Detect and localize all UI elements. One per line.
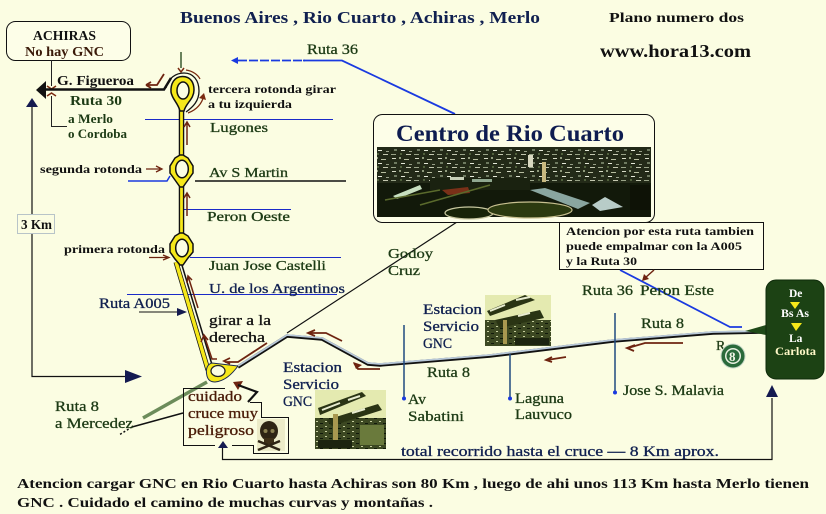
- callout: alternate route notice: Atencion por esta ruta tambien: [566, 224, 754, 238]
- panel: direction De Bs As a La Carlota: [766, 280, 824, 379]
- label: Peron Oeste: Peron Oeste: [207, 210, 290, 225]
- label: Peron Este: Peron Este: [640, 283, 714, 299]
- arrows: direction along Ruta 8: [308, 330, 683, 369]
- label: Godoy Cruz: [388, 247, 433, 279]
- Ruta 36 east line: [620, 270, 742, 327]
- total distance arrow line: [218, 385, 778, 460]
- label: a Merlo o Cordoba: [68, 112, 128, 141]
- label: Juan Jose Castelli: Juan Jose Castelli: [209, 259, 326, 274]
- street: Laguna Lauvuco: Laguna: [515, 391, 565, 407]
- label: primera rotonda: [64, 242, 169, 260]
- label: Ruta A005 with arrow: Ruta A005: [99, 296, 170, 312]
- callout: dangerous crossing: cuidado: [188, 389, 242, 405]
- footer note: GNC . Cuidado el camino de muchas curvas y montañas .: [17, 496, 433, 511]
- label: Estacion Servicio GNC right: Servicio: [423, 319, 479, 335]
- label: Ruta 8 a Mercedez: [55, 399, 134, 432]
- callout: dangerous crossing: peligroso: [188, 423, 254, 439]
- callout: dangerous crossing: cruce muy: [188, 406, 259, 422]
- label: a Merlo o Cordoba: o Cordoba: [68, 127, 128, 141]
- label: girar a la derecha: girar a la: [209, 313, 272, 329]
- arrow: right turn at junction: [224, 343, 267, 364]
- direction arrows along main road: [184, 122, 217, 359]
- label: Ruta 36 top with line: Ruta 36: [307, 42, 358, 58]
- title: Buenos Aires , Rio Cuarto , Achiras , Merlo: [180, 8, 540, 27]
- label: Ruta 8 a Mercedez: a Mercedez: [55, 416, 134, 432]
- panel: direction De Bs As a La Carlota: La: [789, 333, 803, 345]
- label: Estacion Servicio GNC right: [423, 302, 483, 352]
- label: primera rotonda: primera rotonda: [64, 242, 165, 256]
- icon: Ruta 8 badge: [716, 339, 745, 368]
- label: tercera rotonda: [208, 82, 337, 111]
- label: Lugones: Lugones: [210, 121, 268, 136]
- street: Av Sabatini: Sabatini: [408, 409, 464, 425]
- label: girar a la derecha: derecha: [209, 330, 266, 346]
- street: Av Sabatini: Av: [408, 392, 427, 408]
- street: Jose S. Malavia: Jose S. Malavia: [623, 383, 725, 399]
- label: Estacion Servicio GNC right: Estacion: [423, 302, 483, 318]
- label: G. Figueroa: G. Figueroa: [57, 74, 134, 89]
- label: Ruta 8 middle: Ruta 8: [427, 365, 470, 381]
- panel: direction De Bs As a La Carlota: De: [789, 288, 802, 300]
- icon: first roundabout: [170, 233, 193, 265]
- label: a Merlo o Cordoba: a Merlo: [68, 112, 113, 126]
- callout: Achiras no GNC: No hay GNC: [25, 45, 104, 60]
- icon: skull: [257, 419, 285, 451]
- photo: gas station right: [485, 295, 551, 346]
- label: Ruta 8 east: Ruta 8: [641, 316, 684, 332]
- icon: Ruta 8 badge: 8: [729, 349, 736, 364]
- panel: direction De Bs As a La Carlota: Bs As: [781, 308, 810, 320]
- callout: alternate route notice: y la Ruta 30: [566, 254, 637, 268]
- street: Laguna Lauvuco: Lauvuco: [515, 407, 572, 423]
- road: Ruta 8: [119, 325, 766, 435]
- street: Jose S. Malavia: [613, 313, 725, 399]
- label: girar a la derecha: [209, 313, 272, 346]
- icon: junction roundabout: [206, 363, 238, 382]
- callout: Achiras no GNC: ACHIRAS: [33, 28, 96, 43]
- heading: Centro de Rio Cuarto: Centro de Rio Cuarto: [396, 121, 624, 146]
- icon: Ruta 8 badge: R: [716, 339, 726, 354]
- icon: third roundabout: [166, 52, 206, 113]
- Godoy Cruz street line: [287, 222, 457, 333]
- street: Laguna Lauvuco: [508, 354, 572, 423]
- label: tercera rotonda: tercera rotonda girar: [208, 82, 337, 96]
- callout: dangerous crossing: [184, 381, 288, 454]
- icon: second roundabout: [170, 155, 193, 187]
- photo: city aerial: [377, 147, 651, 219]
- label: Ruta 36 east: Ruta 36: [582, 283, 633, 299]
- callout: alternate route notice: [560, 222, 764, 270]
- label: Ruta 30: Ruta 30: [70, 94, 122, 109]
- street: Av Sabatini: [402, 325, 464, 425]
- subtitle: plano numero dos: Plano numero dos: [609, 10, 744, 25]
- footer note: [17, 477, 809, 511]
- footer note: Atencion cargar GNC en Rio Cuarto hasta Achiras son 80 Km , luego de ahi unos 113 Km hasta Merlo tienen: [17, 477, 809, 492]
- arrow: left turn into G. Figueroa: [146, 74, 164, 88]
- street lines: [127, 120, 346, 294]
- label: U. de los Argentinos: U. de los Argentinos: [209, 282, 345, 297]
- label: Estacion Servicio GNC left: [283, 360, 343, 410]
- label: Estacion Servicio GNC left: GNC: [283, 394, 312, 410]
- label: Ruta A005 with arrow: [99, 296, 187, 316]
- label: tercera rotonda: a tu izquierda: [208, 97, 292, 111]
- label: 3 Km: [18, 214, 54, 234]
- label: Godoy Cruz: Godoy: [388, 247, 433, 262]
- label: Estacion Servicio GNC right: GNC: [423, 336, 452, 352]
- panel: Centro de Rio Cuarto: [374, 114, 654, 222]
- label: Estacion Servicio GNC left: Servicio: [283, 377, 339, 393]
- label: Ruta 8 a Mercedez: Ruta 8: [55, 399, 99, 415]
- label: segunda rotonda: segunda rotonda: [40, 162, 142, 176]
- label: Av S Martin: Av S Martin: [209, 166, 288, 181]
- label: 3 Km: 3 Km: [21, 217, 53, 232]
- label: Estacion Servicio GNC left: Estacion: [283, 360, 343, 376]
- route 30 road with connector lines: [36, 60, 171, 126]
- arrow: to Ruta 36 east: [642, 270, 654, 281]
- callout: Achiras no GNC: [6, 22, 130, 60]
- label: total recorrido: total recorrido hasta el cruce — 8 Km aprox.: [401, 444, 719, 460]
- main road with three rotondas: [166, 52, 238, 382]
- photo: gas station left: [315, 390, 386, 449]
- panel: direction De Bs As a La Carlota: Carlota: [775, 346, 816, 358]
- callout: alternate route notice: puede empalmar con la A005: [566, 239, 742, 253]
- website url: www.hora13.com: [600, 41, 751, 61]
- 3 km bracket arrow: [26, 98, 142, 383]
- label: Ruta 36 top with line: [231, 42, 455, 114]
- label: Godoy Cruz: Cruz: [388, 264, 420, 279]
